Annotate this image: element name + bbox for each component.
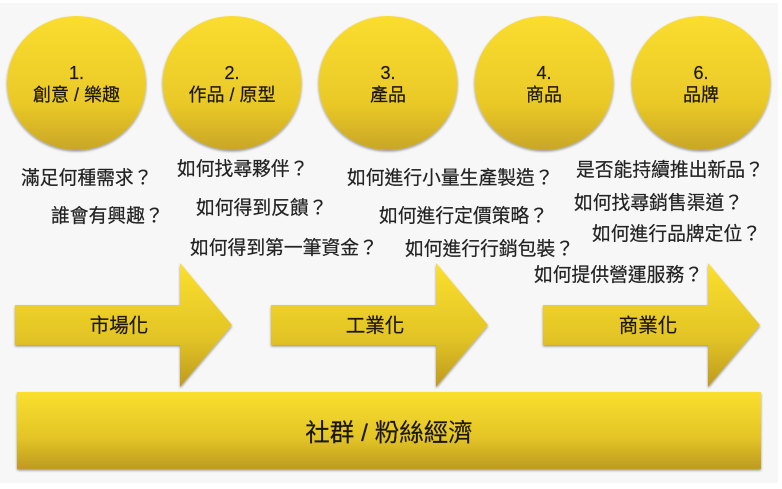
circle 4: goods bbox=[474, 16, 614, 150]
arrow: industrialization bbox=[271, 263, 488, 387]
circle 1: creativity bbox=[7, 16, 146, 150]
circle 4: goods: 4. bbox=[536, 63, 552, 83]
circle 2: prototype: 2. bbox=[224, 63, 240, 83]
circle 4: goods: 商品 bbox=[526, 85, 562, 105]
circle 1: creativity: 1. bbox=[69, 63, 84, 83]
questions: prototype: 如何得到第一筆資金？ bbox=[190, 237, 378, 258]
circle 3: product: 3. bbox=[380, 63, 396, 83]
circle 1: creativity: 創意 / 樂趣 bbox=[33, 85, 120, 105]
questions: prototype bbox=[177, 158, 378, 258]
questions: brand: 如何進行品牌定位？ bbox=[592, 223, 761, 244]
circle 6: brand bbox=[632, 16, 770, 150]
questions: prototype: 如何找尋夥伴？ bbox=[177, 158, 308, 179]
arrow: commercialization bbox=[543, 263, 760, 387]
questions: product: 如何進行小量生產製造？ bbox=[347, 167, 554, 188]
questions: creativity bbox=[21, 167, 164, 226]
questions: prototype: 如何得到反饋？ bbox=[196, 197, 327, 218]
questions: brand bbox=[534, 159, 764, 285]
circle 3: product bbox=[318, 16, 458, 150]
circle 2: prototype: 作品 / 原型 bbox=[188, 85, 276, 105]
questions: product bbox=[347, 167, 574, 259]
arrow: industrialization: 工業化 bbox=[346, 315, 404, 337]
arrow: marketization: 市場化 bbox=[90, 315, 148, 337]
bar: community and fan economy bbox=[17, 392, 761, 469]
circle 6: brand: 6. bbox=[693, 63, 709, 83]
questions: creativity: 滿足何種需求？ bbox=[21, 167, 152, 188]
questions: product: 如何進行行銷包裝？ bbox=[405, 238, 574, 259]
circle 2: prototype bbox=[162, 16, 302, 150]
bar: community and fan economy: 社群 / 粉絲經濟 bbox=[305, 419, 473, 447]
questions: product: 如何進行定價策略？ bbox=[379, 205, 548, 226]
circle 3: product: 產品 bbox=[370, 85, 406, 105]
arrow: marketization bbox=[15, 263, 232, 387]
questions: brand: 是否能持續推出新品？ bbox=[576, 159, 764, 180]
questions: creativity: 誰會有興趣？ bbox=[51, 205, 164, 226]
circle 6: brand: 品牌 bbox=[683, 85, 719, 105]
questions: brand: 如何找尋銷售渠道？ bbox=[574, 192, 743, 213]
questions: brand: 如何提供營運服務？ bbox=[534, 264, 703, 285]
arrow: commercialization: 商業化 bbox=[619, 315, 677, 337]
